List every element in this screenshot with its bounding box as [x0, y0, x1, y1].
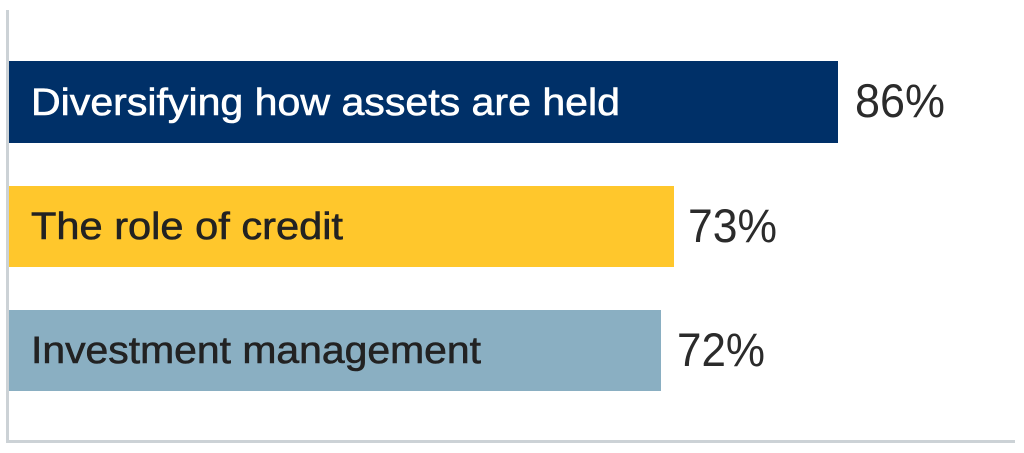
bar: diversifying how assets are held: Diversifying how assets are held — [31, 82, 620, 124]
bar: the role of credit: The role of credit — [31, 206, 343, 248]
bar: diversifying how assets are held — [9, 61, 838, 143]
bar: investment management — [9, 310, 661, 391]
value: 86%: 86% — [855, 74, 945, 127]
value: 73%: 73% — [688, 199, 777, 252]
bar: investment management: Investment management — [31, 330, 481, 372]
value: 72%: 72% — [677, 323, 765, 376]
bar: the role of credit — [9, 186, 674, 267]
